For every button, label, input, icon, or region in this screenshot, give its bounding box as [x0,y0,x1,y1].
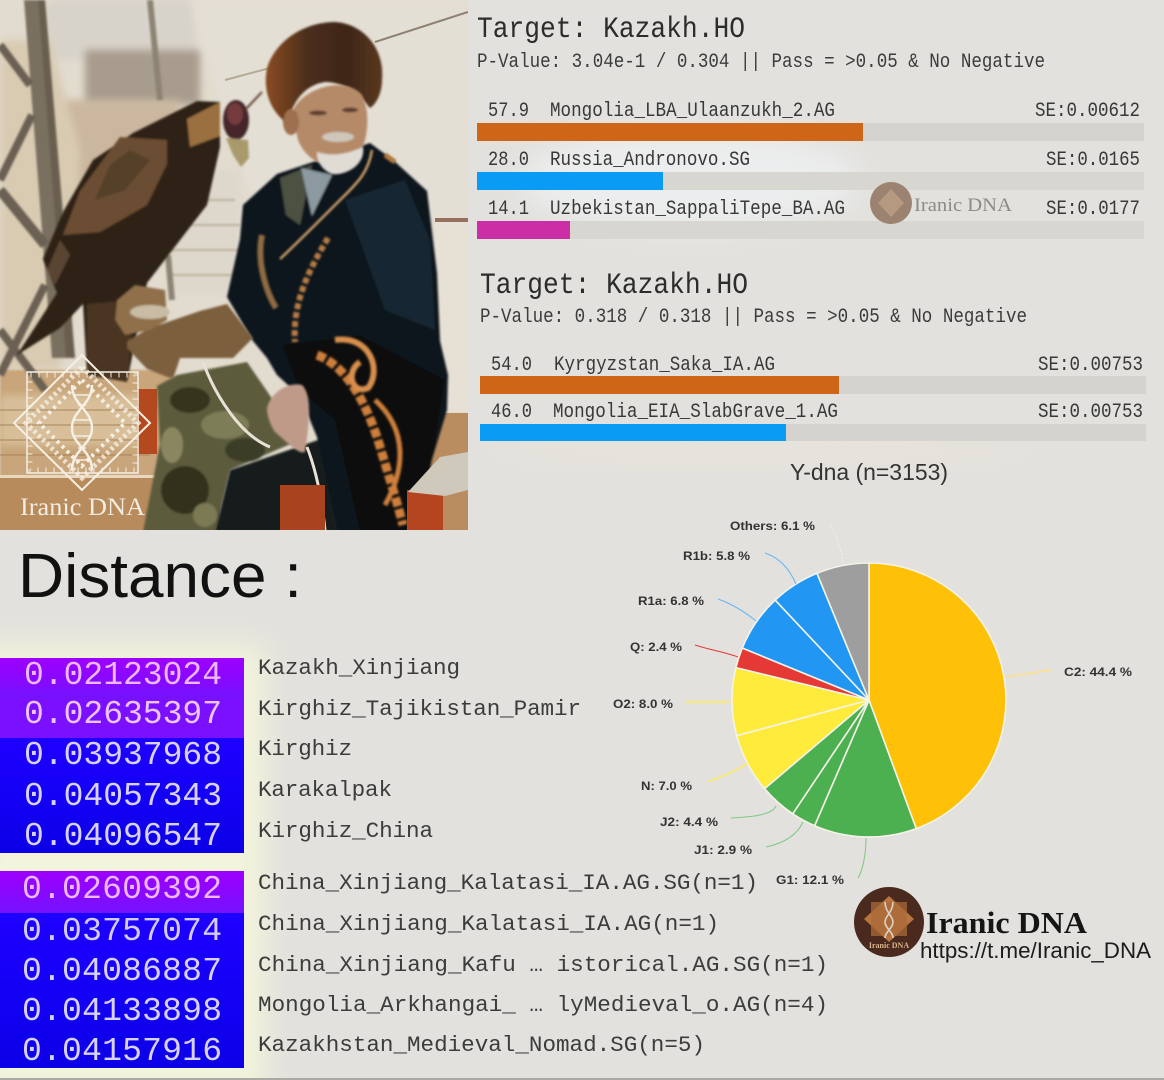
labels: modern populations: Kazakh_Xinjiang [258,655,460,681]
table: ancient sample distances: 0.02609392 [22,871,222,908]
row: Mongolia SlabGrave [480,401,1146,441]
photo: leather glove [115,285,253,379]
logo caption: Iranic DNA [20,494,145,521]
row: Russia Andronovo: SE:0.0165 [1046,149,1140,172]
row: Mongolia LBA: SE:0.00612 [1035,100,1140,123]
labels: modern populations: Kirghiz_Tajikistan_Pamir [258,696,581,722]
row: Russia Andronovo: 28.0 [488,149,529,172]
photo: red post [137,389,157,454]
photo: wooden platform [0,370,468,533]
photo: fur hat [266,22,382,123]
table: modern population distances: 0.04096547 [24,818,222,855]
table: modern population distances: 0.02123024 [24,657,222,694]
row: Russia Andronovo [477,149,1144,190]
pie labels: J2: 4.4 % [660,816,718,829]
row: Russia Andronovo: Russia_Andronovo.SG [550,149,750,172]
labels: ancient samples: Mongolia_Arkhangai_ … lyMedieval_o.AG(n=4) [258,992,828,1018]
pie labels [613,520,1132,887]
heading: target: Target: Kazakh.HO [480,269,748,303]
row: Mongolia LBA: Mongolia_LBA_Ulaanzukh_2.AG [550,100,835,123]
pie chart: Y-DNA haplogroups [613,520,1132,887]
photo backdrop: tent and sky [0,0,468,459]
table: modern population distances: 0.02635397 [24,696,222,733]
row: Kyrgyzstan Saka: SE:0.00753 [1038,354,1143,377]
branding: Iranic DNA badge and link [854,887,1151,963]
table: ancient sample distances: 0.03757074 [22,913,222,950]
row: Mongolia LBA [477,100,1144,141]
leader lines [686,524,1051,878]
chart title: Y-dna (n=3153) [790,459,948,485]
pie labels: O2: 8.0 % [613,698,673,711]
table: ancient sample distances: 0.04133898 [22,993,222,1030]
brand name: Iranic DNA [926,905,1088,940]
labels: modern populations: Kirghiz [258,736,352,762]
row: Mongolia SlabGrave: 46.0 [491,401,532,424]
row: Kyrgyzstan Saka [480,354,1146,394]
icon: round logo: Iranic DNA [869,941,909,950]
pie labels: Q: 2.4 % [630,641,682,654]
table: modern population distances: 0.04057343 [24,778,222,815]
row: Uzbekistan SappaliTepe: Uzbekistan_SappaliTepe_BA.AG [550,198,845,221]
table: ancient sample distances: 0.04157916 [22,1033,222,1070]
pie labels: R1b: 5.8 % [683,550,750,563]
row: Mongolia LBA: 57.9 [488,100,529,123]
heading: target: Target: Kazakh.HO [477,13,745,47]
telegram link: https://t.me/Iranic_DNA [920,938,1151,963]
table: modern population distances [0,657,244,855]
table: ancient sample distances: 0.04086887 [22,953,222,990]
photo: golden eagle [17,92,262,382]
pie slices [732,563,1006,837]
photo: man's face and beard [283,85,367,174]
labels: ancient samples: Kazakhstan_Medieval_Nomad.SG(n=5) [258,1032,705,1058]
photo: eagle hunter with golden eagle [0,0,468,533]
row: Mongolia SlabGrave: SE:0.00753 [1038,401,1143,424]
table: modern population distances: 0.03937968 [24,737,222,774]
table: ancient sample distances [0,871,244,1070]
row: Uzbekistan SappaliTepe: 14.1 [488,198,529,221]
pie labels: N: 7.0 % [641,780,692,793]
panel: qpAdm model 1 [477,13,1144,239]
labels: ancient samples: China_Xinjiang_Kalatasi_IA.AG(n=1) [258,911,719,937]
icon: round logo [854,887,924,957]
pie labels: R1a: 6.8 % [638,595,704,608]
pie labels: J1: 2.9 % [694,844,752,857]
heading: Distance: Distance : [18,542,302,611]
labels: modern populations [258,655,581,844]
row: Uzbekistan SappaliTepe: SE:0.0177 [1046,198,1140,221]
row: Uzbekistan SappaliTepe [477,198,1144,239]
labels: modern populations: Karakalpak [258,777,392,803]
pie labels: Others: 6.1 % [730,520,815,533]
watermark: Iranic DNA [870,182,1012,224]
labels: ancient samples: China_Xinjiang_Kalatasi_IA.AG.SG(n=1) [258,870,758,896]
row: Kyrgyzstan Saka: Kyrgyzstan_Saka_IA.AG [554,354,775,377]
labels: ancient samples [258,870,828,1058]
logo: Iranic DNA diamond emblem [14,355,150,490]
photo: camouflage trousers [143,362,300,532]
photo: stool and saddle cloth [280,452,468,530]
photo: scaffolding poles [0,0,172,390]
photo: white rope [203,362,325,530]
panel: qpAdm model 2 [480,269,1146,441]
pie labels: G1: 12.1 % [776,874,844,887]
p-value line: P-Value: 3.04e-1 / 0.304 || Pass = >0.05 & No Negative [477,51,1045,74]
row: Mongolia SlabGrave: Mongolia_EIA_SlabGrave_1.AG [553,401,838,424]
photo: man's dark coat and lower robe [215,143,448,532]
row: Kyrgyzstan Saka: 54.0 [491,354,532,377]
labels: ancient samples: China_Xinjiang_Kafu … istorical.AG.SG(n=1) [258,952,828,978]
pie labels: C2: 44.4 % [1064,666,1132,679]
photo: man's hand [267,384,309,452]
labels: modern populations: Kirghiz_China [258,818,433,844]
watermark: Iranic DNA: Iranic DNA [914,195,1012,216]
photo: coat embroidery [260,150,403,525]
p-value line: P-Value: 0.318 / 0.318 || Pass = >0.05 & No Negative [480,306,1027,329]
